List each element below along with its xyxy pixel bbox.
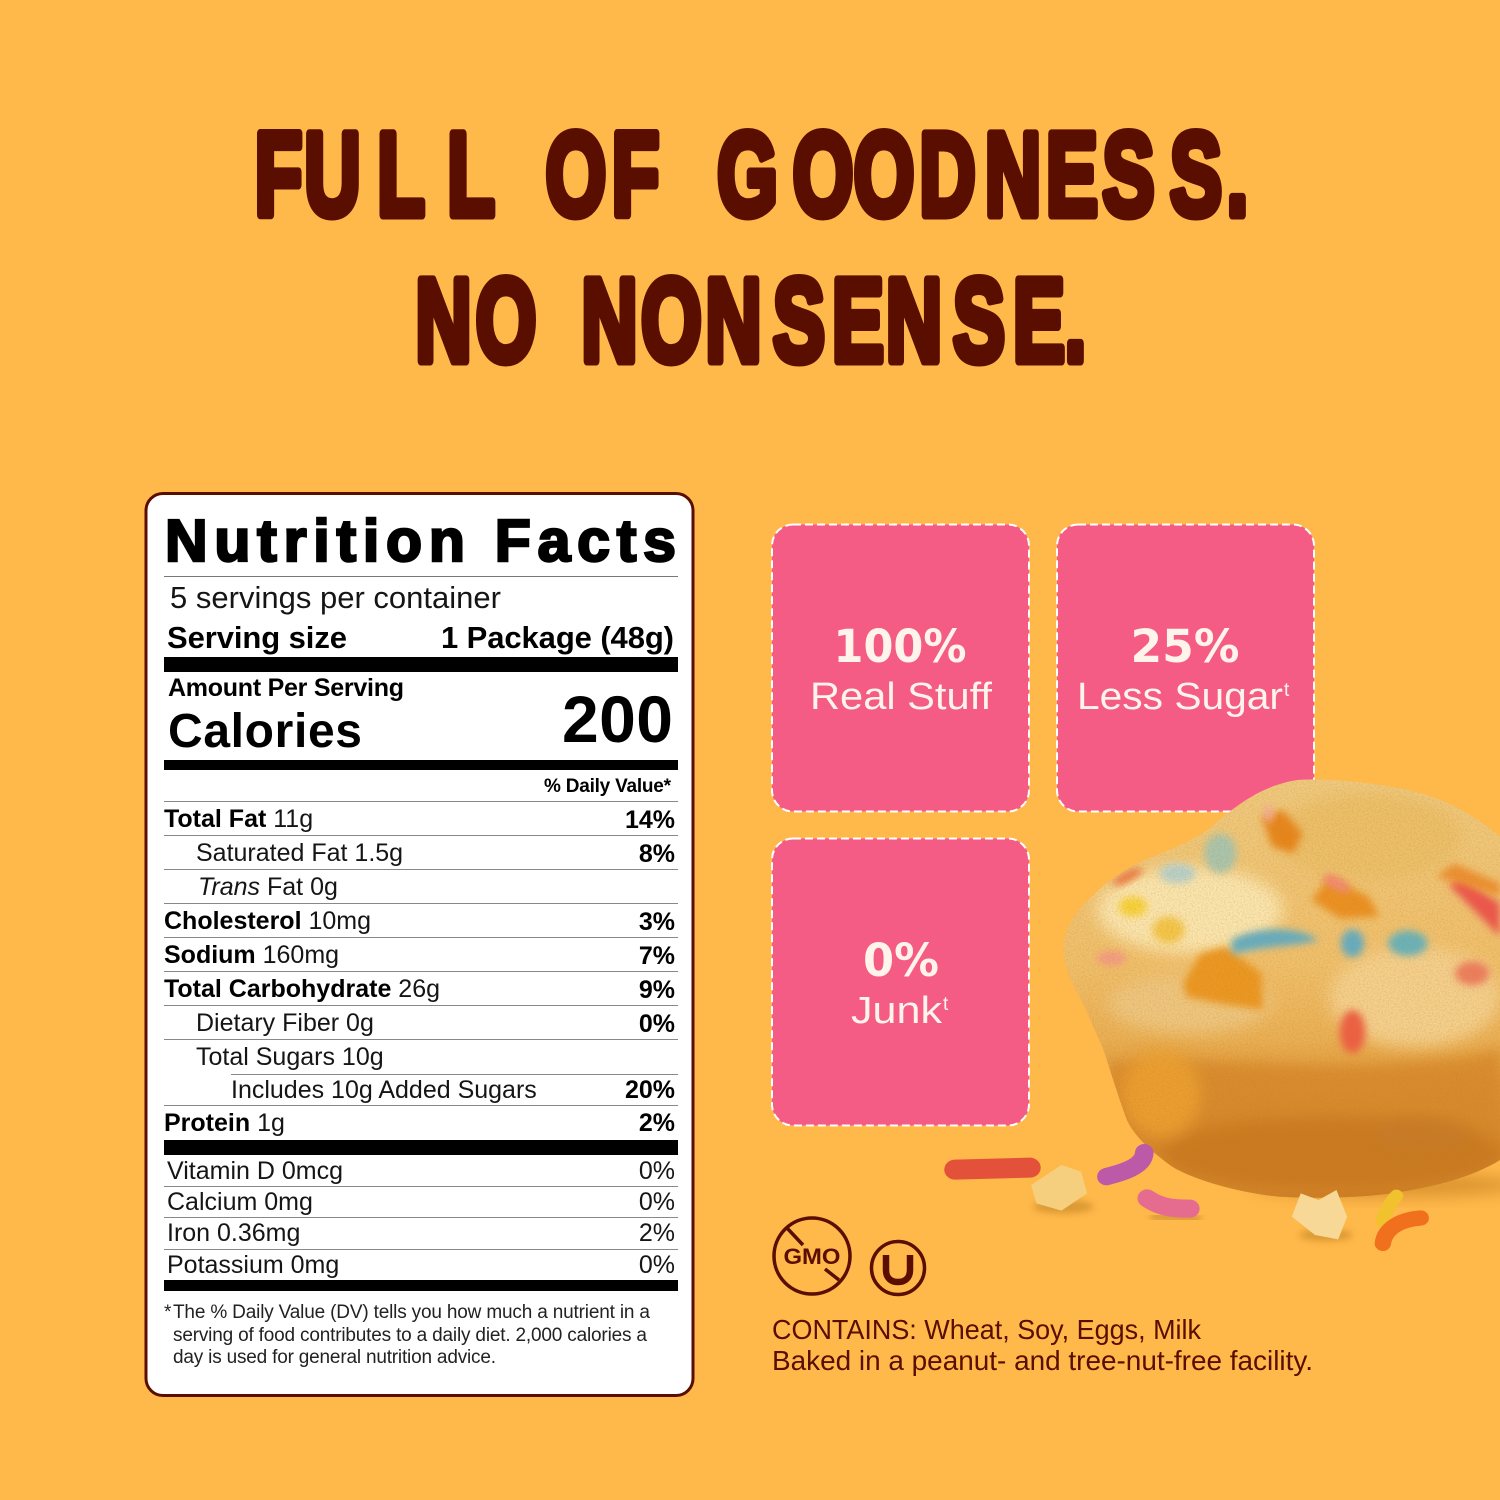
daily value rows: 3% — [639, 908, 675, 936]
panel: 100% real stuff: 100% — [834, 620, 966, 673]
daily value rows: 14% — [625, 806, 675, 834]
panel: 25% less sugar: Less Sugar — [1077, 676, 1283, 718]
calories: 200 — [562, 682, 673, 756]
panel: 25% less sugar: t — [1284, 680, 1290, 701]
calories: Calories — [168, 705, 362, 758]
sprinkle: pink — [1147, 1198, 1197, 1218]
daily value rows: Dietary Fiber 0g — [196, 1009, 374, 1037]
title: FULL OF GOODNESS. — [255, 109, 1248, 241]
muffin body — [1054, 770, 1500, 1203]
daily value rows: Protein 1g — [164, 1109, 285, 1137]
panel: 25% less sugar — [1057, 524, 1314, 812]
vitamins and minerals: 0% — [639, 1157, 675, 1185]
daily value rows: 2% — [639, 1109, 675, 1137]
daily value rows: Cholesterol 10mg — [164, 907, 371, 935]
muffin shadow — [1251, 1172, 1500, 1198]
daily value rows: 9% — [639, 976, 675, 1004]
vitamins and minerals: 2% — [639, 1219, 675, 1247]
daily value rows: 7% — [639, 942, 675, 970]
sprinkle: red — [955, 1168, 1040, 1182]
icon: kosher U — [872, 1242, 924, 1294]
icon: non-GMO: GMO — [784, 1244, 840, 1269]
serving information: 1 Package (48g) — [441, 620, 674, 655]
sprinkle: orange — [1383, 1218, 1421, 1243]
allergen statement: Baked in a peanut- and tree-nut-free facility. — [772, 1345, 1313, 1376]
panel: 0% junk: t — [943, 994, 949, 1015]
footnote: The % Daily Value (DV) tells you how much a nutrient in a — [173, 1302, 650, 1323]
serving information: 5 servings per container — [170, 580, 501, 615]
daily value rows: 20% — [625, 1076, 675, 1104]
panel: 100% real stuff: Real Stuff — [810, 676, 992, 718]
daily value rows: Includes 10g Added Sugars — [231, 1076, 537, 1104]
allergen statement: CONTAINS: Wheat, Soy, Eggs, Milk — [772, 1314, 1202, 1345]
allergen statement — [772, 1314, 1313, 1376]
footnote: serving of food contributes to a daily diet. 2,000 calories a — [173, 1325, 647, 1346]
daily value rows: 0% — [639, 1010, 675, 1038]
title: NO NONSENSE. — [415, 255, 1086, 387]
footnote — [164, 1302, 650, 1368]
daily value rows: Total Carbohydrate 26g — [164, 975, 440, 1003]
footnote: day is used for general nutrition advice. — [173, 1347, 496, 1368]
crumb — [1292, 1190, 1352, 1241]
muffin illustration — [955, 770, 1500, 1243]
daily value rows — [164, 776, 678, 1155]
vitamins and minerals: Iron 0.36mg — [167, 1219, 300, 1247]
daily value rows: 8% — [639, 840, 675, 868]
calories — [164, 674, 678, 770]
daily value rows: Total Fat 11g — [164, 805, 313, 833]
panel: 0% junk — [772, 838, 1029, 1126]
panel: 0% junk: 0% — [863, 934, 939, 987]
panel: nutrition facts — [146, 494, 693, 1396]
vitamins and minerals — [164, 1157, 678, 1291]
vitamins and minerals: 0% — [639, 1251, 675, 1279]
panel: 25% less sugar: 25% — [1130, 620, 1240, 673]
daily value rows: % Daily Value* — [544, 776, 672, 797]
vitamins and minerals: Potassium 0mg — [167, 1251, 339, 1279]
panel: 0% junk: Junk — [851, 990, 943, 1032]
icon: non-GMO — [774, 1218, 850, 1294]
title — [255, 109, 1248, 387]
daily value rows: Saturated Fat 1.5g — [196, 839, 403, 867]
serving information: Serving size — [167, 620, 347, 655]
panel: 100% real stuff — [772, 524, 1029, 812]
daily value rows: Total Sugars 10g — [196, 1043, 384, 1071]
sprinkle: yellow — [1382, 1196, 1396, 1221]
vitamins and minerals: Calcium 0mg — [167, 1188, 313, 1216]
footnote: * — [164, 1302, 172, 1323]
daily value rows: Trans Fat 0g — [198, 873, 338, 901]
crumb — [1031, 1165, 1094, 1213]
sprinkle: purple — [1106, 1153, 1144, 1177]
calories: Amount Per Serving — [168, 674, 404, 702]
vitamins and minerals: Vitamin D 0mcg — [167, 1157, 343, 1185]
nutrition heading: Nutrition Facts — [165, 508, 676, 574]
daily value rows: Sodium 160mg — [164, 941, 339, 969]
vitamins and minerals: 0% — [639, 1188, 675, 1216]
serving information — [164, 576, 678, 672]
